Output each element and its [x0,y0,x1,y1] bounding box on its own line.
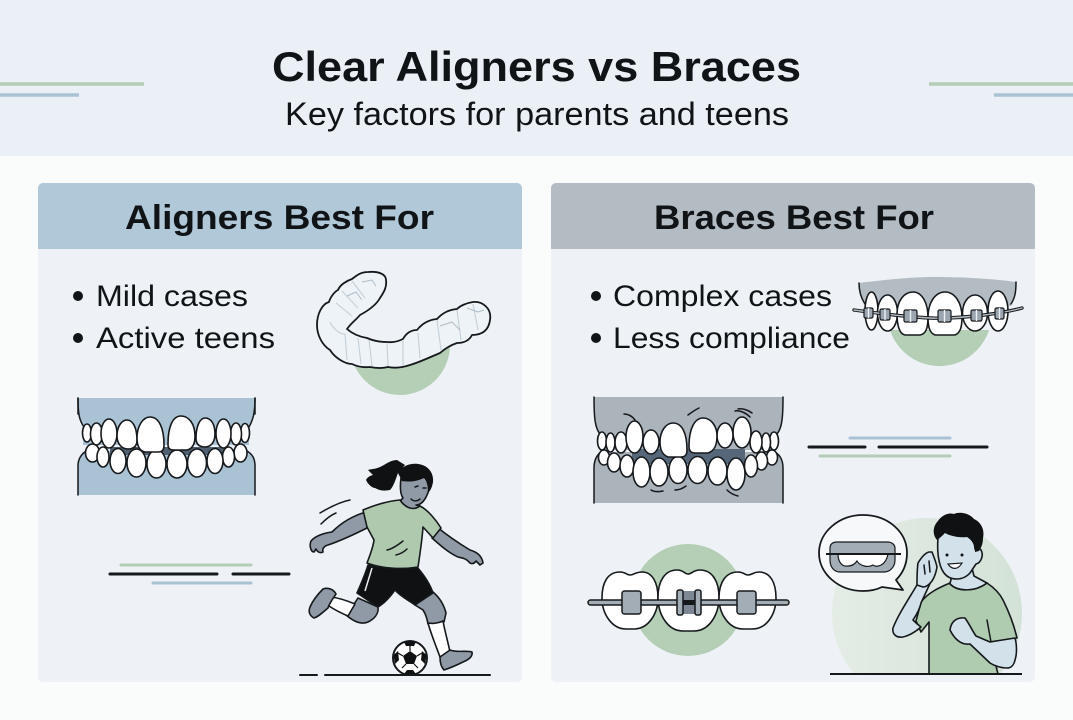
hair [934,513,984,552]
panel header: aligners [38,183,522,249]
panel: braces [551,183,1035,708]
icon: braces on upper teeth [854,277,1022,366]
bullet list: aligners: Active teens [96,322,275,355]
decorative motion lines: braces [809,438,987,456]
icon: teen playing soccer [300,460,490,675]
neck [950,568,987,590]
subtitle: Key factors for parents and teens [285,96,789,132]
shorts [357,565,433,607]
bullet list: braces: Less compliance [613,322,850,355]
icon: braces close-up [588,544,789,656]
icon: teen pointing at braces [818,512,1022,675]
icon: mild teeth [78,398,255,495]
title: Clear Aligners vs Braces [272,43,801,90]
bullet list: aligners [73,280,275,355]
panel: aligners [38,183,522,682]
speech bubble [819,515,907,591]
neck and face [400,474,430,509]
decorative motion lines: aligners [110,565,289,583]
panel header: braces [551,183,1035,249]
face [938,526,982,579]
raised hand [917,552,937,587]
front arm [432,527,483,565]
icon: clear aligner tray [317,272,490,395]
other arm [950,618,1016,668]
raised arm [893,577,933,637]
header band [0,0,1073,156]
icon: crowded teeth [594,397,783,503]
hair [398,464,433,493]
bullet list: braces: Complex cases [613,280,832,313]
heading: aligners best for: Aligners Best For [125,199,434,237]
back leg [346,598,378,623]
back arm [310,512,367,553]
heading: braces best for: Braces Best For [654,199,934,237]
front leg [415,592,446,624]
bullet list: aligners: Mild cases [96,280,248,313]
soccer ball [393,641,427,675]
shirt [363,500,441,568]
shirt [916,583,1017,674]
bullet list: braces [591,280,850,355]
